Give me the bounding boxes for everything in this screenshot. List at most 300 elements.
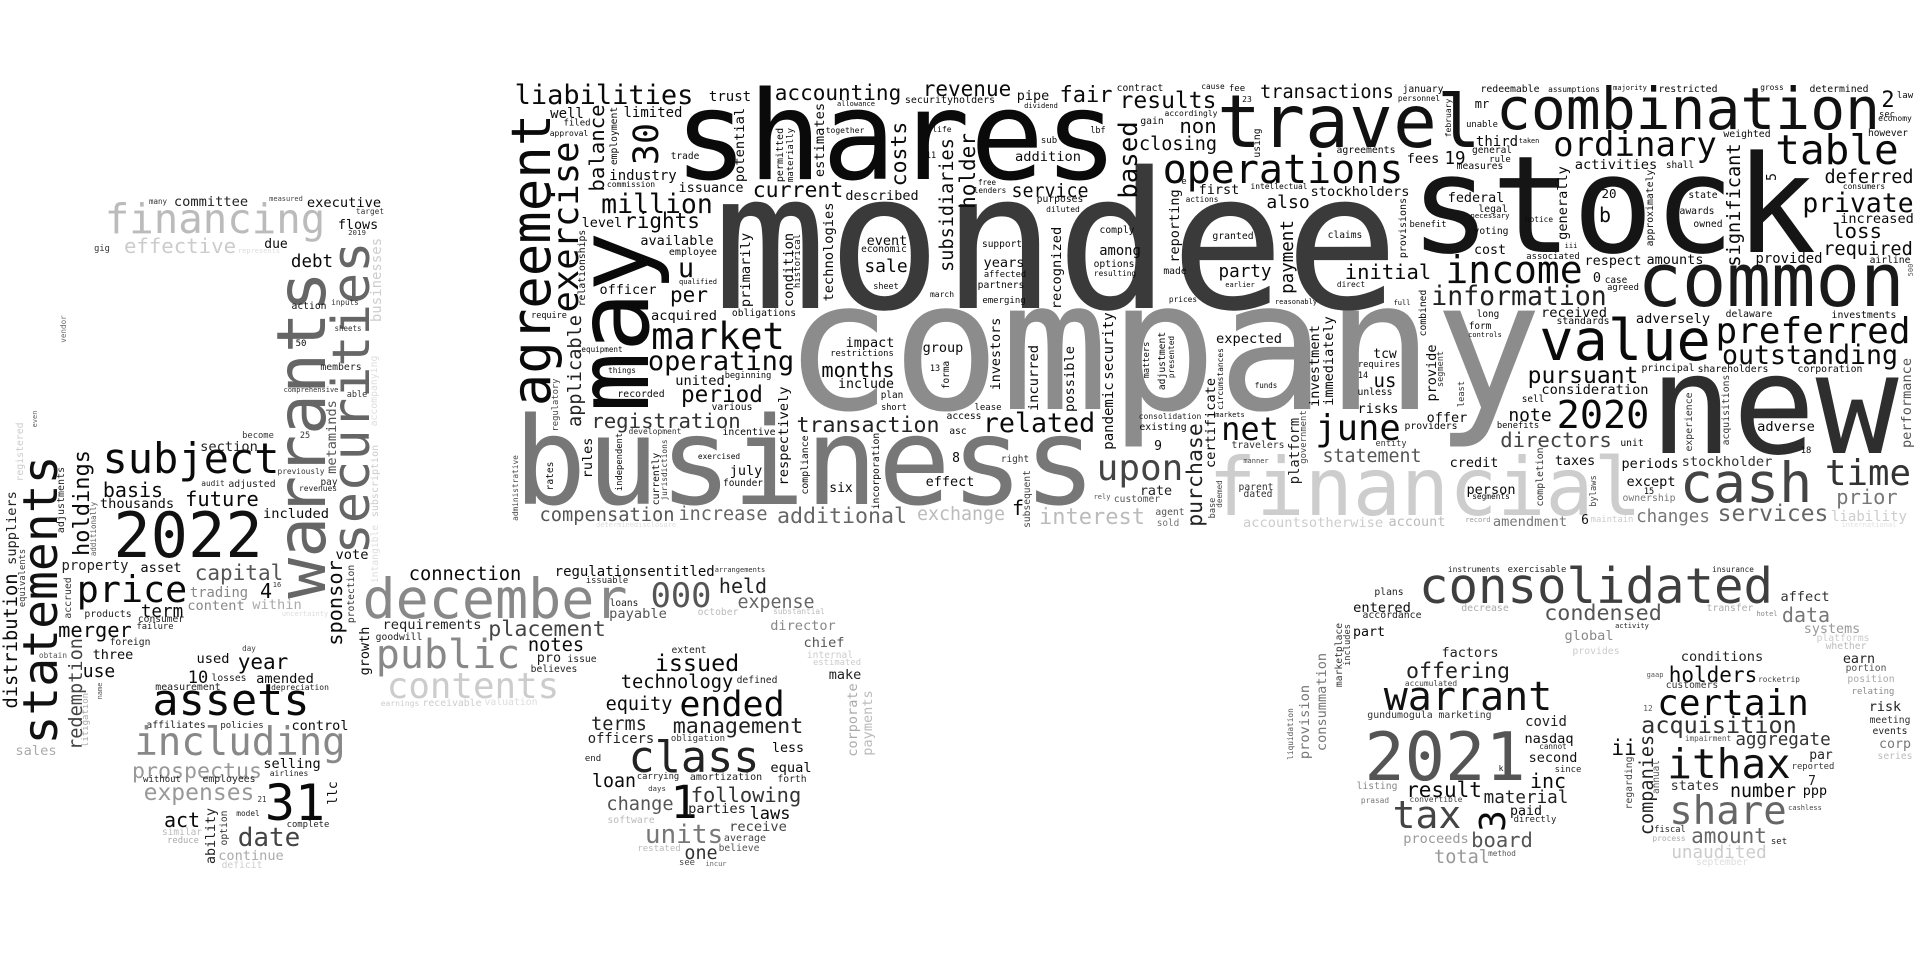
group: smaller words in main block: incentive: [722, 427, 776, 438]
group: smaller words in main block: deemed: [1215, 480, 1224, 508]
group: smaller words in right circle: states: [1671, 778, 1719, 794]
group: smaller words in main block: results: [1120, 88, 1216, 114]
group: smaller words in centre block: following: [691, 783, 801, 807]
group: smaller words in main block: issuance: [678, 180, 744, 196]
group: smaller words in left block: revenues: [299, 484, 337, 493]
group: smaller words in centre block: earnings: [381, 699, 419, 708]
group: smaller words in main block: stockholders: [1311, 184, 1409, 200]
group: smaller words in main block: level: [582, 215, 622, 231]
group: smaller words in main block: interest: [1039, 505, 1145, 530]
group: smaller words in main block: offer: [1427, 410, 1467, 426]
group: smaller words in main block: group: [923, 340, 963, 356]
group: smaller words in left block: day: [242, 644, 256, 653]
group: smaller words in centre block: arrangements: [715, 566, 765, 574]
group: smaller words in centre block: valuation: [484, 697, 538, 708]
group: smaller words in centre block: issuable: [586, 576, 628, 586]
group: smaller words in main block: recognized: [1049, 227, 1065, 309]
group: smaller words in main block: officer: [600, 282, 656, 298]
group: smaller words in right circle: conditions: [1681, 649, 1763, 665]
group: smaller words in left circle: convertible: [1410, 795, 1463, 804]
group: smaller words in left block: 16: [273, 581, 281, 589]
group: smaller words in centre block: management: [673, 714, 803, 739]
group: smaller words in main block: sheet: [873, 282, 899, 292]
group: smaller words in centre block: laws: [750, 804, 790, 824]
group: smaller words in main block: provisions: [1398, 198, 1409, 258]
group: smaller words in main block: 15: [1644, 487, 1654, 497]
group: smaller words in main block: respect: [1585, 253, 1641, 269]
group: smaller words in main block: segments: [1472, 492, 1510, 501]
group: smaller words in main block: pursuant: [1528, 363, 1638, 389]
group: smaller words in right circle: holders: [1669, 663, 1757, 687]
group: smaller words in main block: reporting: [1167, 189, 1183, 263]
group: smaller words in centre block: incur: [705, 860, 727, 868]
group: smaller words in main block: corporation: [1798, 364, 1863, 375]
group: smaller words in left circle: method: [1488, 849, 1516, 858]
group: smaller words in left block: act: [164, 808, 200, 832]
group: smaller words in centre block: make: [829, 667, 861, 683]
group: smaller words in main block: 13: [930, 364, 940, 374]
group: smaller words in main block: effect: [926, 474, 974, 490]
group: smaller words in main block: amendment: [1493, 514, 1567, 530]
group: smaller words in left block: capital: [195, 561, 283, 585]
group: smaller words in centre block: receivable: [423, 698, 482, 709]
panel: lower right word block, left circle: [1286, 558, 1773, 868]
group: smaller words in main block: first: [1199, 182, 1239, 198]
group: smaller words in main block: purposes: [1037, 194, 1083, 205]
group: smaller words in main block: unit: [1620, 438, 1644, 449]
group: smaller words in left block: failure: [136, 622, 174, 632]
group: smaller words in main block: amounts: [1647, 252, 1703, 268]
group: smaller words in main block: voting: [1474, 226, 1508, 237]
group: smaller words in main block: 6: [1581, 513, 1589, 528]
group: smaller words in left block: measured: [269, 195, 303, 203]
group: smaller words in main block: transaction: [796, 413, 940, 438]
group: smaller words in main block: 18: [1801, 446, 1811, 456]
group: smaller words in main block: holder: [956, 133, 980, 209]
group: smaller words in centre block: less: [772, 741, 804, 756]
group: smaller words in left circle: k: [1499, 764, 1504, 773]
group: smaller words in main block: permitted: [775, 128, 786, 182]
group: smaller words in centre block: technology: [621, 672, 733, 693]
group: smaller words in right circle: customers: [1666, 680, 1718, 691]
group: smaller words in main block: impact: [846, 335, 894, 351]
group: smaller words in main block: expected: [1216, 331, 1282, 347]
group: smaller words in main block: regulatory: [551, 379, 561, 431]
group: smaller words in main block: disclosure: [634, 521, 676, 529]
group: smaller words in main block: registration: [591, 409, 741, 433]
group: smaller words in centre block: average: [724, 833, 766, 844]
group: smaller words in left block: due: [264, 237, 288, 252]
group: smaller words in main block: related: [983, 408, 1095, 439]
group: smaller words in main block: prices: [1169, 295, 1197, 304]
group: smaller words in main block: liabilities: [515, 80, 693, 111]
group: smaller words in left block: intangible: [370, 525, 381, 583]
group: smaller words in right circle: fiscal: [1654, 825, 1686, 835]
group: smaller words in left circle: offering: [1406, 659, 1510, 684]
group: smaller words in right circle: hotel: [1756, 610, 1778, 618]
group: smaller words in main block: current: [753, 178, 843, 203]
group: smaller words in main block: risks: [1358, 401, 1398, 417]
group: smaller words in main block: compliance: [800, 435, 811, 494]
group: smaller words in right circle: process: [1652, 834, 1686, 843]
group: smaller words in main block: costs: [887, 122, 912, 186]
group: smaller words in left block: without: [143, 775, 181, 785]
group: smaller words in main block: balance: [585, 104, 609, 192]
group: smaller words in left block: adjusted: [228, 479, 276, 490]
group: smaller words in main block: net: [1221, 410, 1279, 448]
group: smaller words in left block: audit: [201, 479, 225, 488]
word: ithax: ithax: [1667, 740, 1791, 788]
group: smaller words in main block: general: [1472, 145, 1512, 156]
group: smaller words in main block: person: [1466, 482, 1516, 498]
group: smaller words in main block: rates: [545, 462, 556, 490]
group: smaller words in main block: entity: [1375, 439, 1407, 449]
group: smaller words in centre block: equity: [606, 694, 672, 715]
group: smaller words in main block: filed: [563, 118, 591, 128]
group: smaller words in main block: upon: [1097, 448, 1183, 489]
word: new: new: [1649, 325, 1900, 486]
group: smaller words in main block: activities: [1575, 157, 1657, 173]
group: smaller words in left block: suppliers: [4, 491, 20, 565]
group: smaller words in left block: included: [263, 506, 329, 522]
group: smaller words in main block: limited: [623, 105, 683, 121]
group: smaller words in main block: claims: [1328, 230, 1362, 241]
group: smaller words in main block: approval: [550, 129, 588, 138]
group: smaller words in left block: foreign: [110, 637, 150, 648]
group: smaller words in left block: prospectus: [132, 759, 262, 784]
group: smaller words in main block: subsidiaries: [937, 138, 958, 272]
group: smaller words in main block: period: [681, 382, 763, 408]
group: smaller words in main block: condition: [781, 233, 797, 307]
group: smaller words in main block: beginning: [725, 371, 771, 381]
group: smaller words in right circle: companies: [1637, 735, 1658, 835]
group: smaller words in main block: adjustment: [1157, 332, 1168, 390]
group: smaller words in centre block: expense: [737, 592, 815, 613]
group: smaller words in main block: restricted: [1659, 84, 1717, 95]
group: smaller words in centre block: payments: [860, 690, 876, 756]
group: smaller words in main block: completion: [1535, 447, 1546, 506]
group: smaller words in left circle: second: [1529, 750, 1577, 766]
group: smaller words in main block: dividend: [1024, 102, 1058, 110]
group: smaller words in right circle: annual: [1651, 760, 1662, 794]
group: smaller words in centre block: amortization: [690, 772, 762, 783]
group: smaller words in main block: require: [531, 311, 567, 321]
group: smaller words in main block: least: [1457, 381, 1467, 407]
group: smaller words in main block: time: [1825, 453, 1911, 494]
group: smaller words in main block: years: [984, 255, 1024, 271]
group: smaller words in left circle: provides: [1572, 646, 1620, 657]
group: smaller words in main block: increased: [1840, 211, 1914, 227]
group: smaller words in left block: 31: [265, 774, 325, 832]
group: smaller words in left block: 4: [260, 579, 272, 603]
group: smaller words in main block: unless: [1358, 387, 1392, 398]
group: smaller words in main block: rules: [580, 438, 596, 478]
group: smaller words in main block: consideration: [1541, 382, 1649, 398]
group: smaller words in main block: plan: [881, 390, 903, 401]
group: smaller words in main block: periods: [1622, 456, 1678, 472]
group: smaller words in main block: services: [1718, 501, 1828, 527]
group: smaller words in main block: sub: [1041, 136, 1057, 146]
panel: main rectangular word block: [500, 66, 1915, 534]
group: smaller words in main block: airline: [1870, 255, 1911, 266]
group: smaller words in left block: trading: [190, 585, 248, 601]
group: smaller words in main block: 8: [952, 451, 960, 466]
group: smaller words in left block: date: [238, 823, 300, 853]
group: smaller words in main block: 5: [1765, 173, 1780, 181]
group: smaller words in main block: markets: [1215, 411, 1245, 419]
group: smaller words in left block: 50: [296, 339, 306, 349]
group: smaller words in left circle: exercisable: [1508, 565, 1566, 575]
group: smaller words in left block: complete: [287, 820, 329, 830]
group: smaller words in centre block: pro: [537, 650, 561, 666]
group: smaller words in left circle: marketplace: [1334, 623, 1345, 687]
word: cash: cash: [1680, 451, 1812, 515]
group: smaller words in main block: form: [1469, 321, 1492, 332]
group: smaller words in main block: purchase: [1183, 423, 1208, 527]
group: smaller words in left block: effective: [124, 234, 236, 258]
group: smaller words in left block: distribution: [1, 573, 22, 709]
group: smaller words in main block: private: [1802, 188, 1914, 219]
group: smaller words in left block: businesses: [369, 238, 385, 322]
group: smaller words in main block: 11: [926, 151, 936, 161]
group: smaller words in main block: case: [1605, 275, 1628, 286]
group: smaller words in main block: government: [1299, 410, 1309, 464]
group: smaller words in main block: exercise: [546, 142, 587, 312]
group: smaller words in main block: delaware: [1726, 309, 1772, 320]
group: smaller words in main block: record: [1465, 516, 1491, 524]
group: smaller words in main block: transactions: [1260, 82, 1394, 103]
group: smaller words in main block: account: [1389, 514, 1445, 530]
group: smaller words in main block: industry: [609, 168, 677, 184]
group: smaller words in right circle: events: [1872, 726, 1908, 737]
group: smaller words in main block: 0: [1593, 270, 1601, 286]
group: smaller words in main block: 500: [1907, 264, 1915, 276]
group: smaller words in main block: reasonably: [1275, 298, 1317, 306]
group: smaller words in main block: short: [881, 403, 907, 413]
group: smaller words in left block: redemption: [66, 638, 87, 750]
group: smaller words in main block: legal: [1478, 204, 1508, 215]
group: smaller words in main block: united: [675, 373, 725, 389]
group: smaller words in centre block: loans: [610, 598, 638, 609]
panel: lower right word block, right circle: [1611, 565, 1912, 868]
group: smaller words in left block: property: [62, 558, 128, 574]
group: smaller words in centre block: [376, 564, 876, 868]
group: smaller words in main block: trust: [709, 89, 751, 105]
group: smaller words in left block: sponsor: [323, 560, 347, 646]
group: smaller words in main block: february: [1444, 99, 1453, 137]
group: smaller words in main block: together: [826, 126, 864, 135]
group: smaller words in left block: many: [149, 197, 168, 206]
group: smaller words in main block: awards: [1680, 206, 1714, 217]
group: smaller words in main block: gain: [1140, 116, 1164, 127]
group: smaller words in main block: exercised: [698, 452, 740, 461]
group: smaller words in main block: respectively: [776, 387, 792, 485]
group: smaller words in left circle: cannot: [1539, 742, 1567, 751]
group: smaller words in main block: provide: [1424, 345, 1440, 401]
group: smaller words in main block: mr: [1475, 97, 1489, 111]
group: smaller words in main block: potential: [732, 108, 748, 182]
group: smaller words in main block: made: [1163, 266, 1187, 277]
group: smaller words in main block: among: [1099, 243, 1141, 259]
group: smaller words in left block: asset: [140, 560, 182, 576]
group: smaller words in centre block: parties: [688, 801, 746, 817]
group: smaller words in left block: executive: [307, 195, 381, 211]
group: smaller words in main block: july: [730, 463, 762, 479]
word: warrant: warrant: [1384, 674, 1552, 720]
group: smaller words in main block: sale: [864, 256, 908, 277]
group: smaller words in left circle: proceeds: [1403, 831, 1469, 847]
group: smaller words in main block: incorporation: [871, 433, 882, 509]
group: smaller words in main block: forma: [941, 361, 952, 389]
group: smaller words in left circle: accumulated: [1405, 679, 1457, 688]
group: smaller words in main block: include: [838, 377, 894, 392]
group: smaller words in main block: market: [651, 315, 785, 358]
group: smaller words in centre block: internal: [807, 650, 853, 661]
word: contents: contents: [387, 666, 559, 707]
group: smaller words in left block: pay: [321, 477, 338, 488]
group: smaller words in left block: selling: [263, 756, 321, 772]
group: smaller words in left block: reduce: [167, 836, 199, 846]
group: smaller words in centre block: ended: [679, 685, 785, 725]
word: consolidated: consolidated: [1419, 558, 1773, 615]
group: smaller words in left block: subscription: [370, 445, 381, 517]
group: smaller words in left block: model: [236, 809, 260, 818]
word: stock: stock: [1410, 127, 1816, 284]
group: smaller words in main block: maintain: [1591, 515, 1633, 525]
group: smaller words in main block: administrative: [511, 455, 520, 521]
group: smaller words in main block: agreed: [1607, 283, 1639, 293]
group: smaller words in main block: iii: [1565, 242, 1577, 250]
group: smaller words in left block: gig: [94, 244, 110, 254]
group: smaller words in main block: 2020: [1557, 393, 1649, 438]
group: smaller words in main block: presented: [1167, 336, 1176, 378]
group: smaller words in main block: six: [829, 481, 853, 496]
group: smaller words in main block: cost: [1474, 243, 1506, 258]
group: smaller words in main block: materially: [786, 127, 796, 182]
group: smaller words in main block: 20: [1601, 186, 1617, 201]
group: smaller words in right circle: systems: [1804, 622, 1860, 637]
group: smaller words in main block: months: [821, 358, 895, 382]
group: smaller words in main block: compensation: [539, 505, 675, 526]
group: smaller words in main block: also: [1266, 192, 1310, 213]
group: smaller words in left block: adjustments: [56, 467, 67, 533]
group: smaller words in main block: agent: [1155, 507, 1185, 518]
group: smaller words in main block: determined: [1810, 84, 1868, 95]
group: smaller words in centre block: change: [606, 794, 674, 815]
group: smaller words in left circle: board: [1471, 828, 1533, 852]
group: smaller words in left block: used: [197, 651, 229, 667]
group: smaller words in left circle: gundumogula: [1367, 710, 1433, 721]
panel: centre word block: [363, 564, 876, 868]
group: smaller words in main block: asc: [949, 426, 967, 437]
group: smaller words in main block: additional: [777, 504, 907, 529]
group: smaller words in left circle: listing: [1357, 781, 1397, 792]
group: smaller words in left block: members: [320, 362, 362, 373]
group: smaller words in left circle: global: [1564, 628, 1614, 644]
group: smaller words in main block: notice: [1525, 215, 1553, 224]
group: smaller words in main block: us: [1374, 370, 1396, 392]
group: smaller words in left circle: since: [1555, 765, 1581, 775]
group: smaller words in main block: fees: [1407, 151, 1439, 167]
group: smaller words in main block: taken: [1519, 137, 1539, 145]
group: smaller words in main block: 23: [1242, 95, 1252, 104]
panel: left word block: [1, 194, 385, 871]
group: smaller words in main block: independent: [615, 433, 625, 491]
group: smaller words in left block: inputs: [331, 298, 359, 307]
group: smaller words in left block: represents: [238, 247, 280, 255]
group: smaller words in main block: information: [1431, 281, 1607, 312]
group: smaller words in main block: sold: [1157, 518, 1179, 529]
group: smaller words in left block: within: [252, 597, 302, 613]
group: smaller words in left circle: marketing: [1438, 710, 1492, 721]
group: smaller words in main block: consumers: [1843, 182, 1885, 191]
group: smaller words in centre block: equal: [770, 760, 812, 776]
group: smaller words in main block: trade: [671, 151, 700, 162]
group: smaller words in main block: earlier: [1225, 281, 1255, 289]
group: smaller words in main block: increase: [678, 504, 768, 525]
group: smaller words in main block: base: [1208, 498, 1218, 518]
group: smaller words in main block: founder: [723, 478, 763, 489]
group: smaller words in left block: accrued: [63, 577, 74, 619]
group: smaller words in main block: generally: [1555, 166, 1571, 240]
group: smaller words in left block: consumer: [138, 614, 184, 625]
group: smaller words in main block: table: [1775, 126, 1899, 174]
group: smaller words in main block: security: [1101, 312, 1117, 380]
group: smaller words in main block: requires: [1358, 360, 1400, 370]
group: smaller words in main block: jurisdictions: [660, 439, 669, 501]
group: smaller words in main block: employment: [609, 107, 620, 165]
group: smaller words in left block: deficit: [222, 860, 262, 871]
group: smaller words in main block: affected: [984, 270, 1026, 280]
group: smaller words in right circle: reported: [1792, 762, 1834, 772]
group: smaller words in main block: available: [640, 233, 714, 249]
group: smaller words in main block: assumptions: [1548, 85, 1600, 94]
group: smaller words in main block: [511, 77, 1915, 531]
word: 2022: 2022: [113, 499, 263, 572]
group: smaller words in right circle: cashless: [1788, 804, 1822, 812]
group: smaller words in centre block: entitled: [647, 564, 715, 580]
group: smaller words in left block: target: [356, 207, 384, 216]
group: smaller words in left block: employees: [202, 774, 256, 785]
group: smaller words in main block: using: [1252, 128, 1263, 158]
group: smaller words in main block: unable: [1466, 120, 1498, 130]
group: smaller words in left block: measurement: [155, 682, 221, 693]
group: smaller words in left block: airlines: [270, 769, 308, 778]
group: smaller words in main block: 2: [1881, 88, 1895, 113]
group: smaller words in main block: long: [1477, 309, 1499, 320]
group: smaller words in main block: credit: [1450, 455, 1498, 471]
group: smaller words in main block: million: [601, 189, 713, 220]
group: smaller words in left circle: [1286, 565, 1662, 868]
group: smaller words in centre block: requirements: [383, 617, 481, 633]
group: smaller words in centre block: october: [698, 607, 739, 618]
group: smaller words in main block: however: [1868, 128, 1908, 139]
group: smaller words in right circle: ii: [1611, 736, 1637, 760]
group: smaller words in left circle: paid: [1510, 804, 1542, 819]
group: smaller words in left block: 10: [188, 668, 208, 688]
group: smaller words in main block: preferred: [1715, 311, 1911, 352]
group: smaller words in left block: growth: [357, 627, 373, 675]
word: tax: tax: [1393, 793, 1461, 837]
group: smaller words in centre block: receive: [729, 819, 787, 835]
group: smaller words in left block: ability: [204, 808, 219, 864]
group: smaller words in left circle: accordance: [1363, 610, 1422, 621]
group: smaller words in main block: non: [1179, 114, 1217, 138]
group: smaller words in left circle: factors: [1442, 645, 1498, 661]
group: smaller words in main block: shareholders: [1698, 364, 1768, 375]
group: smaller words in main block: adverse: [1757, 419, 1815, 435]
group: smaller words in left block: section: [200, 439, 258, 455]
